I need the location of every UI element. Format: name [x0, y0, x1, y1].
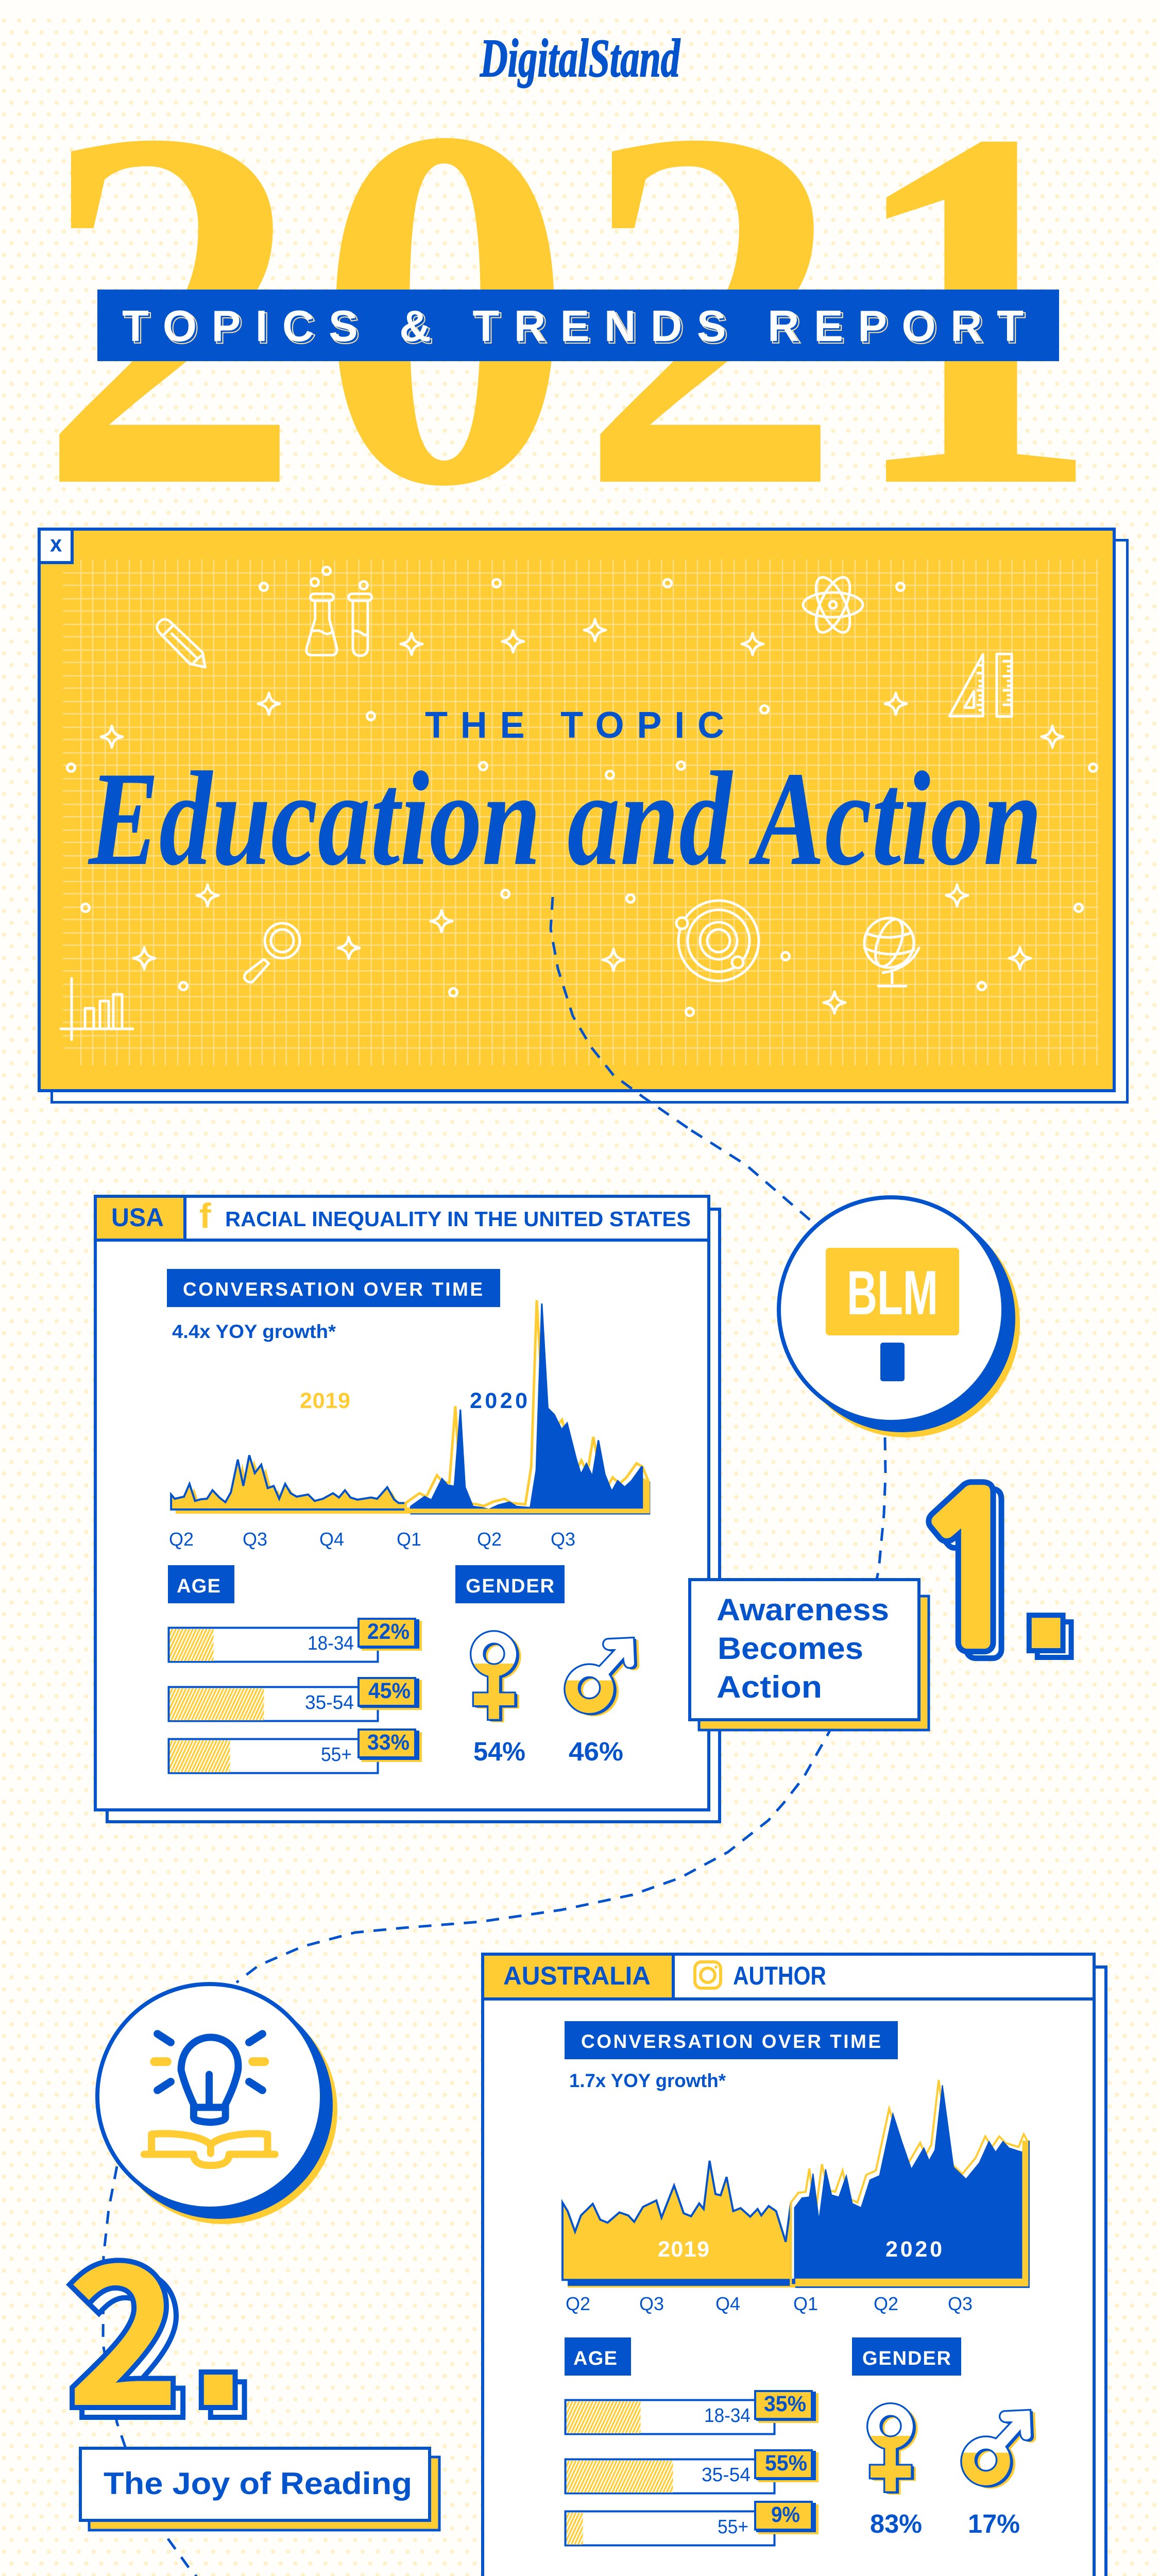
number 2: 2 — [66, 2181, 180, 2461]
chart labels: Q2 — [477, 1529, 502, 1550]
big year 2021: 0 — [316, 22, 574, 592]
chart labels: 2020 — [470, 1388, 527, 1413]
bar: 35-54: 35-54 — [305, 1692, 354, 1714]
bar: 18-34: 18-34 — [704, 2405, 751, 2427]
bar: 35-54: 35-54 — [702, 2464, 751, 2486]
bar: 35-54: 55% — [765, 2451, 807, 2476]
chart labels: Q2 — [874, 2293, 898, 2314]
heading: gender — [852, 2337, 961, 2376]
chart labels: Q4 — [319, 1529, 344, 1550]
gender percentages: 83% — [870, 2509, 922, 2538]
bar: 18-34: 18-34 — [308, 1633, 354, 1654]
callout: awareness becomes action: Action — [717, 1670, 822, 1704]
icon: globe — [864, 916, 919, 986]
header: usa: f — [199, 1196, 211, 1235]
icon: magnifier — [244, 923, 300, 982]
header: usa: RACIAL INEQUALITY IN THE UNITED STATES — [225, 1207, 691, 1231]
chart labels: Q2 — [566, 2293, 590, 2314]
chart labels: Q1 — [793, 2293, 818, 2314]
decorative sparkles and circles — [67, 567, 1097, 1016]
chart labels: Q3 — [639, 2293, 664, 2314]
growth note: 1.7x YOY growth* — [569, 2070, 726, 2091]
bar: 55+: 9% — [771, 2502, 800, 2527]
subheading: conversation over time — [565, 2021, 898, 2059]
circle: blm sign: BLM — [847, 1258, 938, 1328]
chart labels: Q2 — [169, 1529, 194, 1550]
callout: awareness becomes action: Becomes — [718, 1631, 863, 1666]
connector: dashed path between sections — [103, 1130, 1021, 2576]
growth note: 4.4x YOY growth* — [172, 1321, 336, 1342]
chart labels: Q3 — [551, 1529, 575, 1550]
big year 2021 — [37, 22, 1102, 594]
heading: age — [565, 2337, 631, 2376]
chart labels — [566, 2237, 973, 2314]
header: usa — [95, 1196, 709, 1240]
number 2: . — [199, 2230, 256, 2458]
chart labels — [169, 1388, 575, 1550]
age and gender: usa — [168, 1565, 639, 1773]
big year 2021: 2 — [578, 23, 843, 594]
circle: lightbulb and book — [97, 1984, 337, 2224]
callout: awareness becomes action — [690, 1580, 929, 1730]
age and gender: australia — [565, 2337, 1036, 2545]
chart labels: Q3 — [243, 1529, 267, 1550]
bar: 55+ — [566, 2502, 819, 2545]
heading: the topic: THE TOPIC — [425, 705, 724, 746]
badge: x: X — [50, 536, 62, 555]
callout: awareness becomes action: Awareness — [717, 1592, 889, 1627]
bar: 35-54 — [566, 2450, 819, 2494]
header: australia — [483, 1954, 1094, 1999]
bar: 35-54 — [169, 1678, 422, 1721]
header: australia: AUSTRALIA — [503, 1961, 651, 1990]
title banner: TOPICS & TRENDS REPORT — [122, 302, 1024, 351]
heading: gender — [455, 1565, 565, 1603]
number 2 — [66, 2181, 256, 2471]
number 1: 1 — [909, 1471, 1033, 1675]
subheading: conversation over time — [167, 1269, 500, 1307]
big year 2021: 2 — [37, 23, 302, 594]
heading: gender: GENDER — [466, 1575, 554, 1597]
badge: x — [39, 529, 72, 563]
number 1: . — [1018, 1464, 1075, 1691]
callout: the joy of reading: The Joy of Reading — [104, 2466, 412, 2501]
bar: 55+: 55+ — [718, 2516, 748, 2538]
callout: the joy of reading — [80, 2448, 439, 2530]
chart labels: Q1 — [397, 1529, 421, 1550]
bar: 18-34 — [169, 1619, 422, 1662]
bar: 18-34: 22% — [367, 1619, 410, 1644]
heading: age: AGE — [573, 2348, 617, 2369]
number 1: 1 — [909, 1471, 1033, 1675]
gender percentages: 46% — [569, 1737, 623, 1766]
number 2: . — [190, 2221, 247, 2448]
icons: gender symbols — [867, 2403, 1036, 2495]
chart labels: Q3 — [948, 2293, 973, 2314]
number 1: 1 — [917, 1478, 1042, 1682]
circle: blm sign — [779, 1197, 1020, 1437]
title banner: TOPICS & TRENDS REPORT — [124, 304, 1026, 353]
gender percentages — [473, 1737, 623, 1766]
number 2: 2 — [76, 2191, 190, 2471]
gender percentages: 17% — [968, 2509, 1020, 2538]
icon: set square and ruler — [949, 654, 1012, 717]
header: australia: AUTHOR — [733, 1961, 826, 1990]
gender percentages: 54% — [473, 1737, 525, 1766]
header: usa: USA — [111, 1203, 164, 1232]
bar: 55+: 55+ — [321, 1744, 352, 1766]
icon: pencil — [157, 619, 205, 667]
chart labels: Q4 — [715, 2293, 740, 2314]
chart labels: 2019 — [658, 2237, 709, 2262]
bar: 18-34: 35% — [764, 2392, 806, 2416]
number 1: . — [1026, 1470, 1083, 1698]
chart labels: 2020 — [885, 2237, 942, 2262]
bar: 55+: 33% — [367, 1730, 410, 1755]
logo: DigitalStand — [480, 28, 680, 88]
panel: the topic — [39, 529, 1127, 1130]
icons: gender symbols — [471, 1631, 639, 1722]
heading: age — [168, 1565, 234, 1603]
area chart: australia — [563, 2080, 1031, 2290]
subheading: conversation over time: CONVERSATION OVER TIME — [183, 1279, 483, 1300]
panel: usa — [95, 1196, 720, 1822]
gender percentages — [870, 2509, 1020, 2538]
bar: 55+ — [169, 1730, 422, 1773]
chart labels: 2019 — [300, 1388, 350, 1413]
icon: flask and test tube — [306, 594, 372, 656]
title banner — [97, 290, 1059, 361]
bar: 35-54: 45% — [368, 1679, 411, 1703]
icon: atom — [803, 572, 863, 637]
number 1: 1 — [917, 1478, 1042, 1682]
heading: age: AGE — [177, 1575, 220, 1597]
icon: solar system — [676, 901, 759, 981]
icon: lightbulb — [144, 2034, 275, 2165]
area chart: usa — [171, 1300, 654, 1515]
big year 2021: 1 — [845, 23, 1102, 594]
heading: gender: GENDER — [862, 2348, 951, 2369]
icon: bar chart — [61, 978, 133, 1040]
panel: australia — [483, 1954, 1106, 2576]
connector: dashed start in panel — [551, 897, 691, 1130]
number 1 — [909, 1464, 1083, 1698]
subheading: conversation over time: CONVERSATION OVER TIME — [581, 2031, 881, 2052]
bar: 18-34 — [566, 2391, 819, 2434]
